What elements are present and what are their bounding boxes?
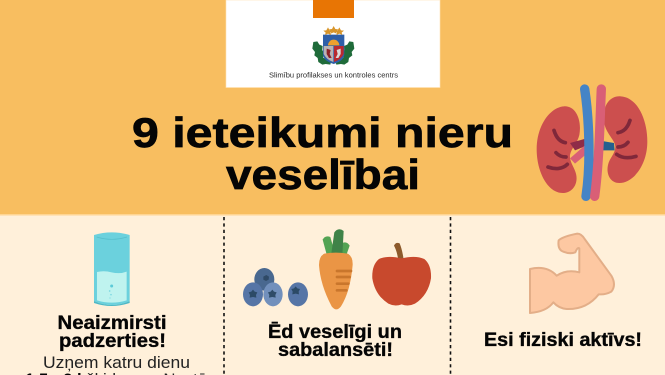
icon: apple	[372, 243, 431, 306]
icon: blueberries	[243, 268, 308, 306]
icon: flexed arm	[530, 234, 614, 313]
icon: kidneys	[537, 89, 647, 196]
heading: padzerties!	[59, 330, 166, 352]
divider: right	[450, 217, 452, 375]
heading: Esi fiziski aktīvs!	[484, 329, 642, 351]
title	[132, 109, 513, 198]
orange tab	[313, 0, 354, 18]
title: veselībai	[226, 151, 420, 198]
panel: healthy eating	[243, 229, 431, 361]
heading: sabalansēti!	[278, 339, 393, 361]
title: 9 ieteikumi nieru	[132, 109, 513, 156]
heading: Ēd veselīgi un	[268, 321, 402, 343]
divider: left	[223, 217, 225, 375]
body text	[25, 353, 208, 375]
icon: carrot	[319, 229, 353, 309]
heading: Neaizmirsti	[58, 312, 166, 334]
heading	[268, 321, 402, 361]
panel: hydration	[25, 232, 208, 375]
panel: physical activity	[484, 234, 642, 351]
body text: Uzņem katru dienu	[43, 353, 190, 372]
logo panel	[226, 0, 440, 88]
heading	[58, 312, 166, 352]
icon: glass of water	[94, 232, 130, 306]
organisation name: Slimību profilakses un kontroles centrs	[269, 70, 398, 80]
icon: coat of arms	[312, 26, 354, 65]
header band	[0, 0, 665, 216]
